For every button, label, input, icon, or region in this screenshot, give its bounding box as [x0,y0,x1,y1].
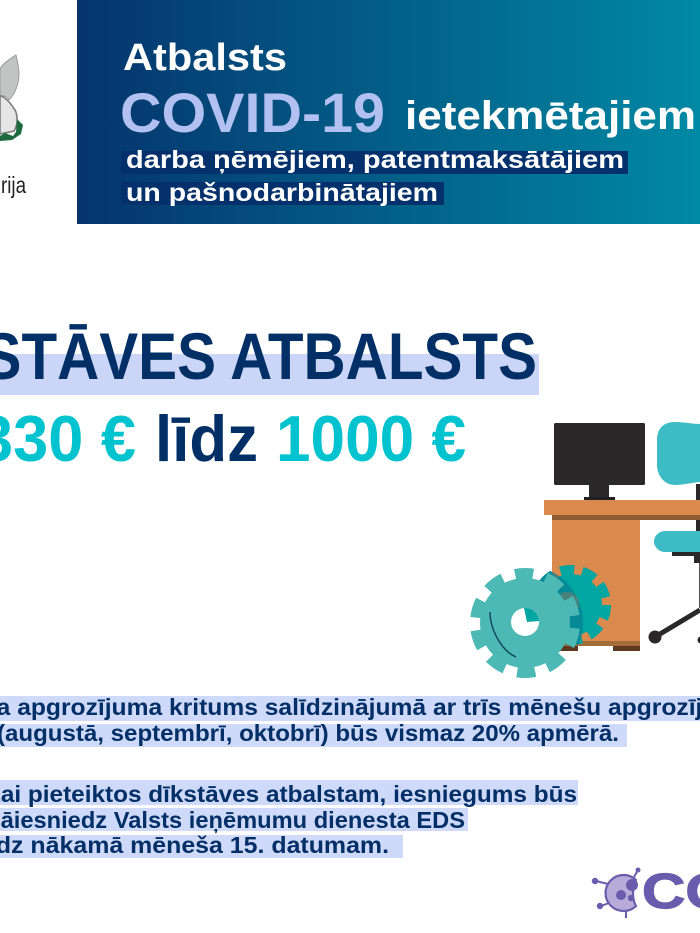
heading: Atbalsts: Atbalsts [123,37,287,79]
text block: how to apply [0,780,578,858]
text block: eligibility condition [0,694,700,747]
icon: desk [544,500,700,651]
panel: title banner [77,0,700,224]
body line 3: Lai pieteiktos dīkstāves atbalstam, iesniegums būs [0,781,577,807]
icon: crest body [0,96,17,134]
icon: virus [593,868,640,918]
illustration: desk, computer, chair and gears [467,422,700,681]
icon: small gear [540,565,611,645]
subtitle line 2: un pašnodarbinātajiem [126,179,438,207]
highlight band line 1 [0,696,700,721]
subtitle line 1: darba ņēmējiem, patentmaksātājiem [126,146,624,174]
highlight band line 3 [0,780,578,805]
highlight band line 5 [0,835,403,858]
heading: COVID-19: COVID-19 [120,81,385,144]
heading: ietekmetajiem: ietekmētajiem [405,94,696,138]
word: lidz: līdz [155,402,258,475]
icon: crest laurel [0,119,23,141]
ministry name: rija [1,172,26,198]
icon: chair [648,422,700,644]
body line 4: jāiesniedz Valsts ieņēmumu dienesta EDS [0,807,465,833]
highlight band line 4 [0,808,468,831]
icon: large gear [471,569,579,677]
icon: crest wing [0,55,19,100]
logo: ministry crest and name [0,55,26,198]
icon: monitor [554,423,645,502]
body line 2: (augustā, septembrī, oktobrī) būs vismaz 20% apmērā. [0,720,619,746]
highlight band line 2 [0,724,627,747]
amount range [0,402,466,475]
logo: COVID virus mark [593,865,700,919]
amount: 1000 euro: 1000 € [276,402,466,475]
